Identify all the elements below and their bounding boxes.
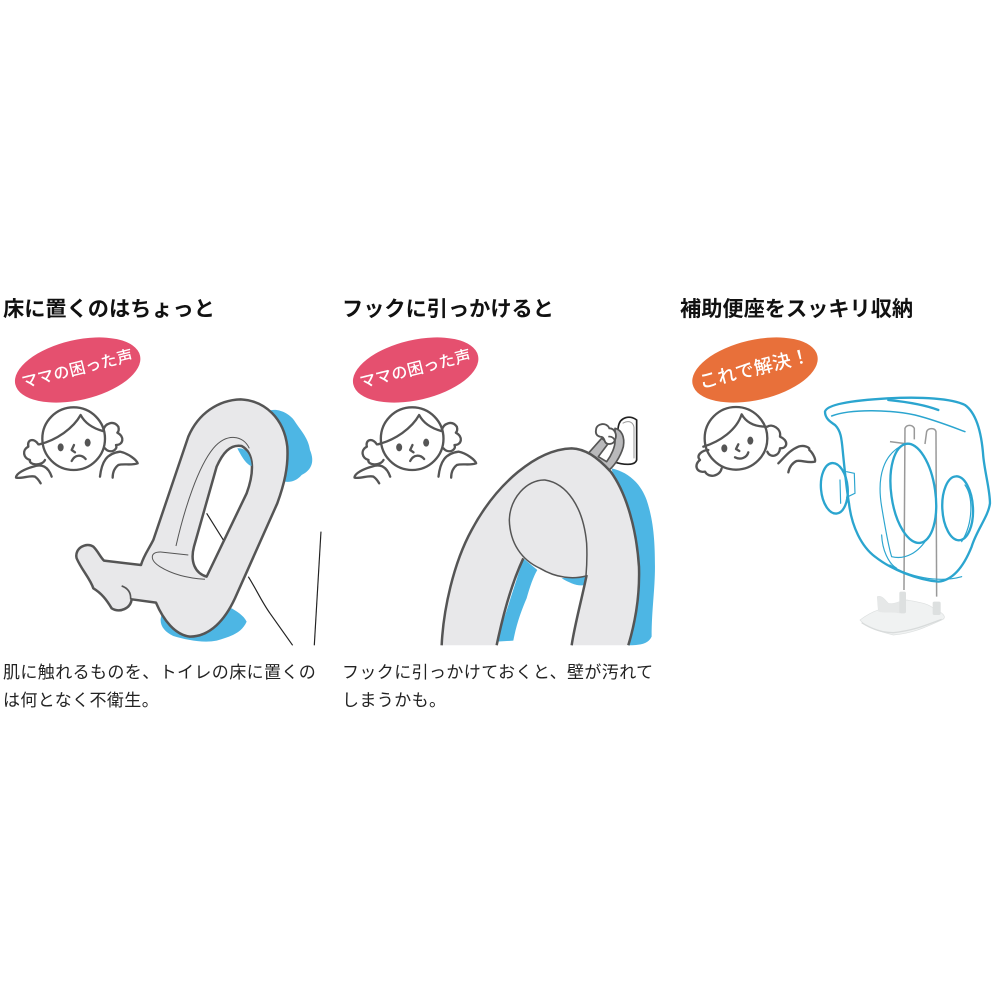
hook and strap (588, 417, 637, 471)
badge: mama's voice (9, 326, 147, 414)
badge: mama's voice: ママの困った声 (20, 347, 135, 392)
heading: floor: 床に置くのはちょっと (3, 297, 215, 321)
seat opening (193, 446, 252, 577)
heading: solution: 補助便座をスッキリ収納 (680, 297, 913, 321)
panel: floor (3, 297, 321, 710)
seat body (442, 448, 639, 645)
seat outline (819, 398, 990, 582)
badge: solved: これで解決！ (697, 345, 812, 393)
badge: mama's voice: ママの困った声 (358, 347, 473, 392)
stand base (860, 592, 944, 635)
illustration: stand with seat outline (819, 398, 990, 635)
body text: hook: しまうかも。 (342, 691, 446, 710)
body text: floor: 肌に触れるものを、トイレの床に置くの (3, 663, 316, 682)
body text: floor: は何となく不衛生。 (3, 691, 159, 710)
illustration: potty seat on hook (442, 417, 655, 645)
stain: contact areas (497, 468, 655, 645)
panel: solution (680, 297, 990, 635)
black lines: floor and wall edge (207, 513, 321, 645)
heading: hook: フックに引っかけると (342, 297, 554, 321)
illustration: potty seat on floor (76, 399, 312, 642)
icon: worried woman (354, 407, 476, 483)
icon: worried woman (16, 407, 138, 483)
stand wires (890, 425, 937, 597)
badge: mama's voice (347, 326, 485, 414)
stain: wall contact (267, 410, 312, 482)
seat detail lines (176, 437, 249, 546)
icon: smiling woman (696, 407, 815, 476)
badge: solved (686, 326, 824, 414)
stain: floor contact (161, 608, 247, 642)
seat body (76, 399, 288, 637)
body text: hook: フックに引っかけておくと、壁が汚れて (342, 663, 654, 682)
panel: hook (342, 297, 655, 710)
